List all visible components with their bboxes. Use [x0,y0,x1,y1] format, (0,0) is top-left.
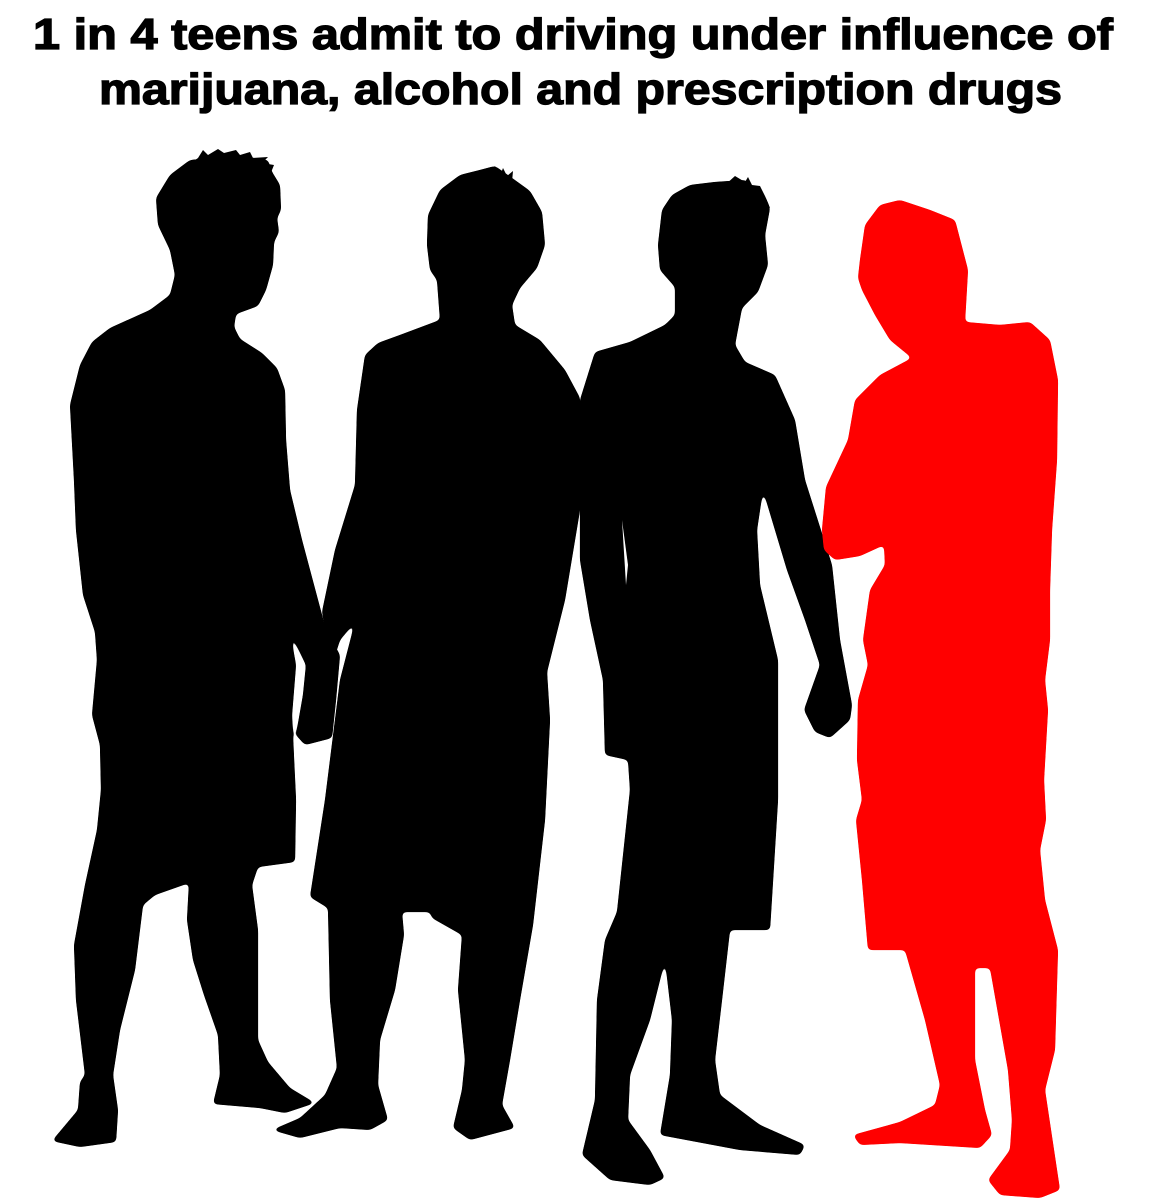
title [33,10,1113,114]
silhouette: teen 4 (red) [822,200,1060,1198]
silhouette: teen 1 (black) [52,149,340,1147]
silhouette: teen 2 (black) [272,166,580,1140]
title: 1 in 4 teens admit to driving under influence of [33,10,1113,59]
title: marijuana, alcohol and prescription drugs [99,65,1062,114]
silhouette: teen 3 (black) [580,176,852,1185]
silhouettes: four teens [52,149,1060,1198]
